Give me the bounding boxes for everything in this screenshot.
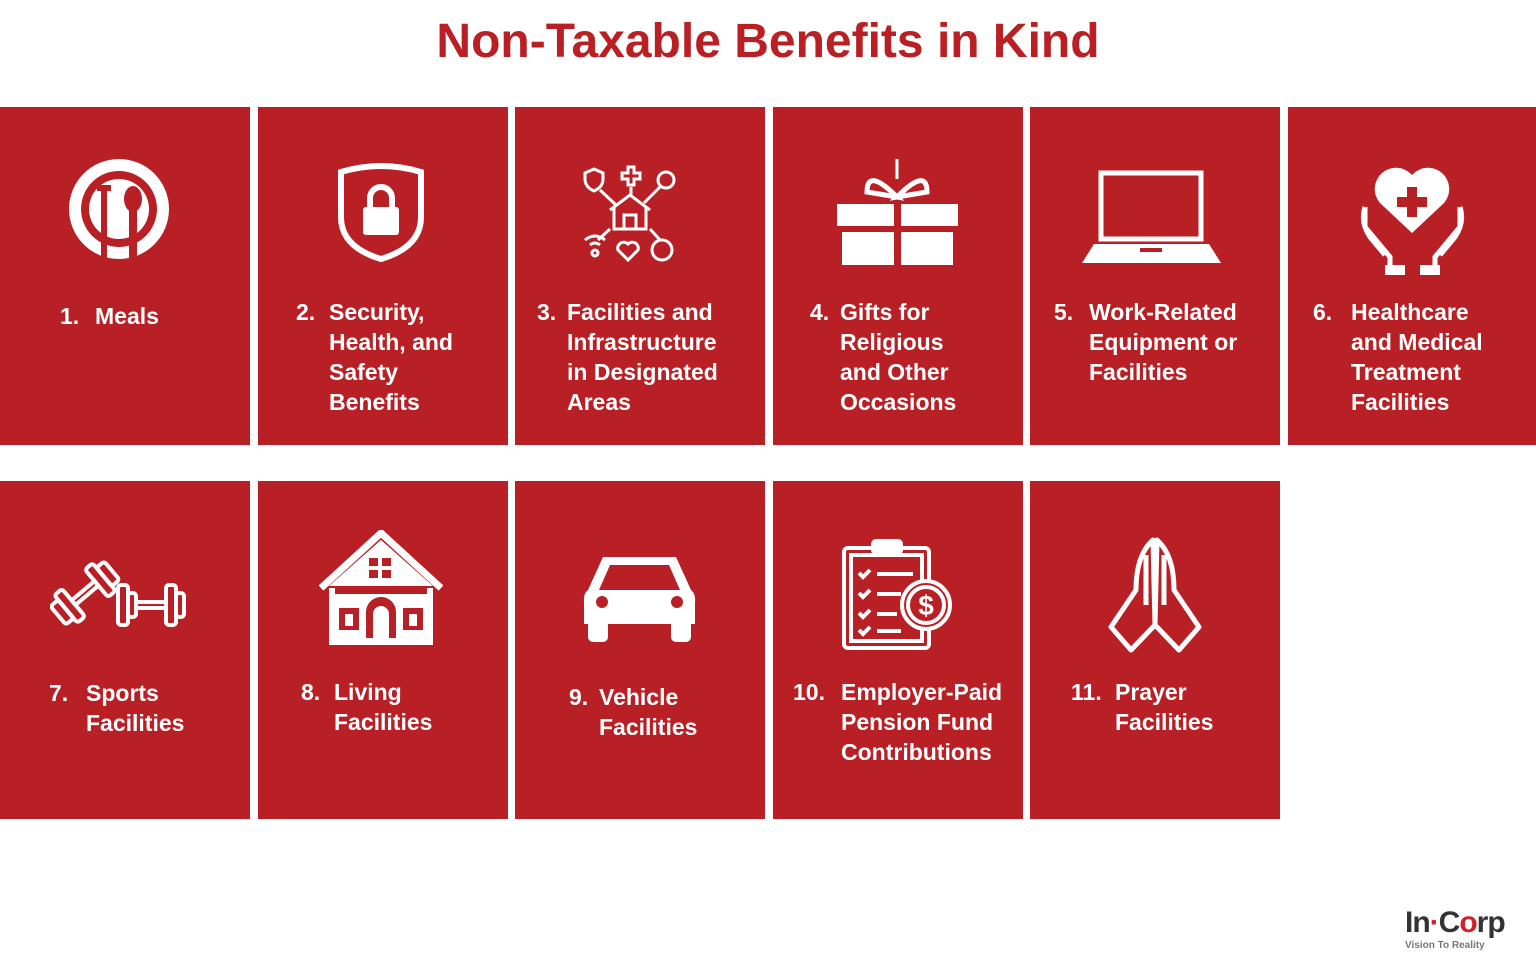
label: vehicle: 9. <box>569 684 588 710</box>
text: Meals <box>95 303 159 329</box>
text: Contributions <box>841 739 992 765</box>
label: sports: 7. <box>49 680 68 706</box>
text: Benefits <box>329 389 420 415</box>
text: Equipment or <box>1089 329 1237 355</box>
panel: healthcare <box>1288 107 1536 445</box>
text: Facilities <box>1089 359 1187 385</box>
text: Safety <box>329 359 398 385</box>
text: and Other <box>840 359 949 385</box>
panel: living <box>258 481 508 819</box>
text: Facilities <box>1351 389 1449 415</box>
label: security: 2. <box>296 299 315 325</box>
label: facilities: 3. <box>537 299 556 325</box>
panel: vehicle <box>515 481 765 819</box>
text: Religious <box>840 329 944 355</box>
panel: sports <box>0 481 250 819</box>
text: Facilities <box>599 714 697 740</box>
label: healthcare: 6. <box>1313 299 1332 325</box>
icon: gift <box>837 159 958 265</box>
text: Prayer <box>1115 679 1187 705</box>
text: Employer-Paid <box>841 679 1002 705</box>
icon: car <box>584 557 696 642</box>
icon: shield lock <box>338 163 424 262</box>
text: Facilities <box>334 709 432 735</box>
text: Areas <box>567 389 631 415</box>
icon: clipboard dollar: $ <box>918 590 934 621</box>
text: Facilities and <box>567 299 713 325</box>
text: Sports <box>86 680 159 706</box>
icon: praying hands <box>1108 538 1202 652</box>
panel: facilities infrastructure <box>515 107 765 445</box>
title: Non-Taxable Benefits in Kind <box>436 15 1100 68</box>
icon: dumbbells <box>50 560 186 627</box>
icon: house <box>319 530 443 645</box>
text: Gifts for <box>840 299 929 325</box>
text: Security, <box>329 299 424 325</box>
label: pension: 10. <box>793 679 825 705</box>
text: Work-Related <box>1089 299 1237 325</box>
label: prayer: 11. <box>1071 679 1102 705</box>
text: Pension Fund <box>841 709 993 735</box>
text: Occasions <box>840 389 956 415</box>
icon: laptop <box>1082 170 1221 263</box>
panel: work equipment <box>1030 107 1280 445</box>
panel: gifts <box>773 107 1023 445</box>
text: Health, and <box>329 329 453 355</box>
text: and Medical <box>1351 329 1483 355</box>
text: Facilities <box>86 710 184 736</box>
text: Facilities <box>1115 709 1213 735</box>
text: Infrastructure <box>567 329 717 355</box>
label: meals: 1. <box>60 303 79 329</box>
logo: In·Corp <box>1405 906 1505 939</box>
panel: security <box>258 107 508 445</box>
text: Healthcare <box>1351 299 1469 325</box>
panel: meals <box>0 107 250 445</box>
label: living: 8. <box>301 679 320 705</box>
icon: heart hands <box>1360 168 1464 275</box>
label: gifts: 4. <box>810 299 829 325</box>
panel: pension <box>773 481 1023 819</box>
icon: plate <box>69 159 169 259</box>
text: in Designated <box>567 359 718 385</box>
icon: network house <box>584 166 676 262</box>
label: work: 5. <box>1054 299 1073 325</box>
text: Vehicle <box>599 684 678 710</box>
text: Living <box>334 679 402 705</box>
icon: clipboard dollar <box>842 539 952 650</box>
panel: prayer <box>1030 481 1280 819</box>
logo: Vision To Reality <box>1405 940 1485 951</box>
text: Treatment <box>1351 359 1461 385</box>
